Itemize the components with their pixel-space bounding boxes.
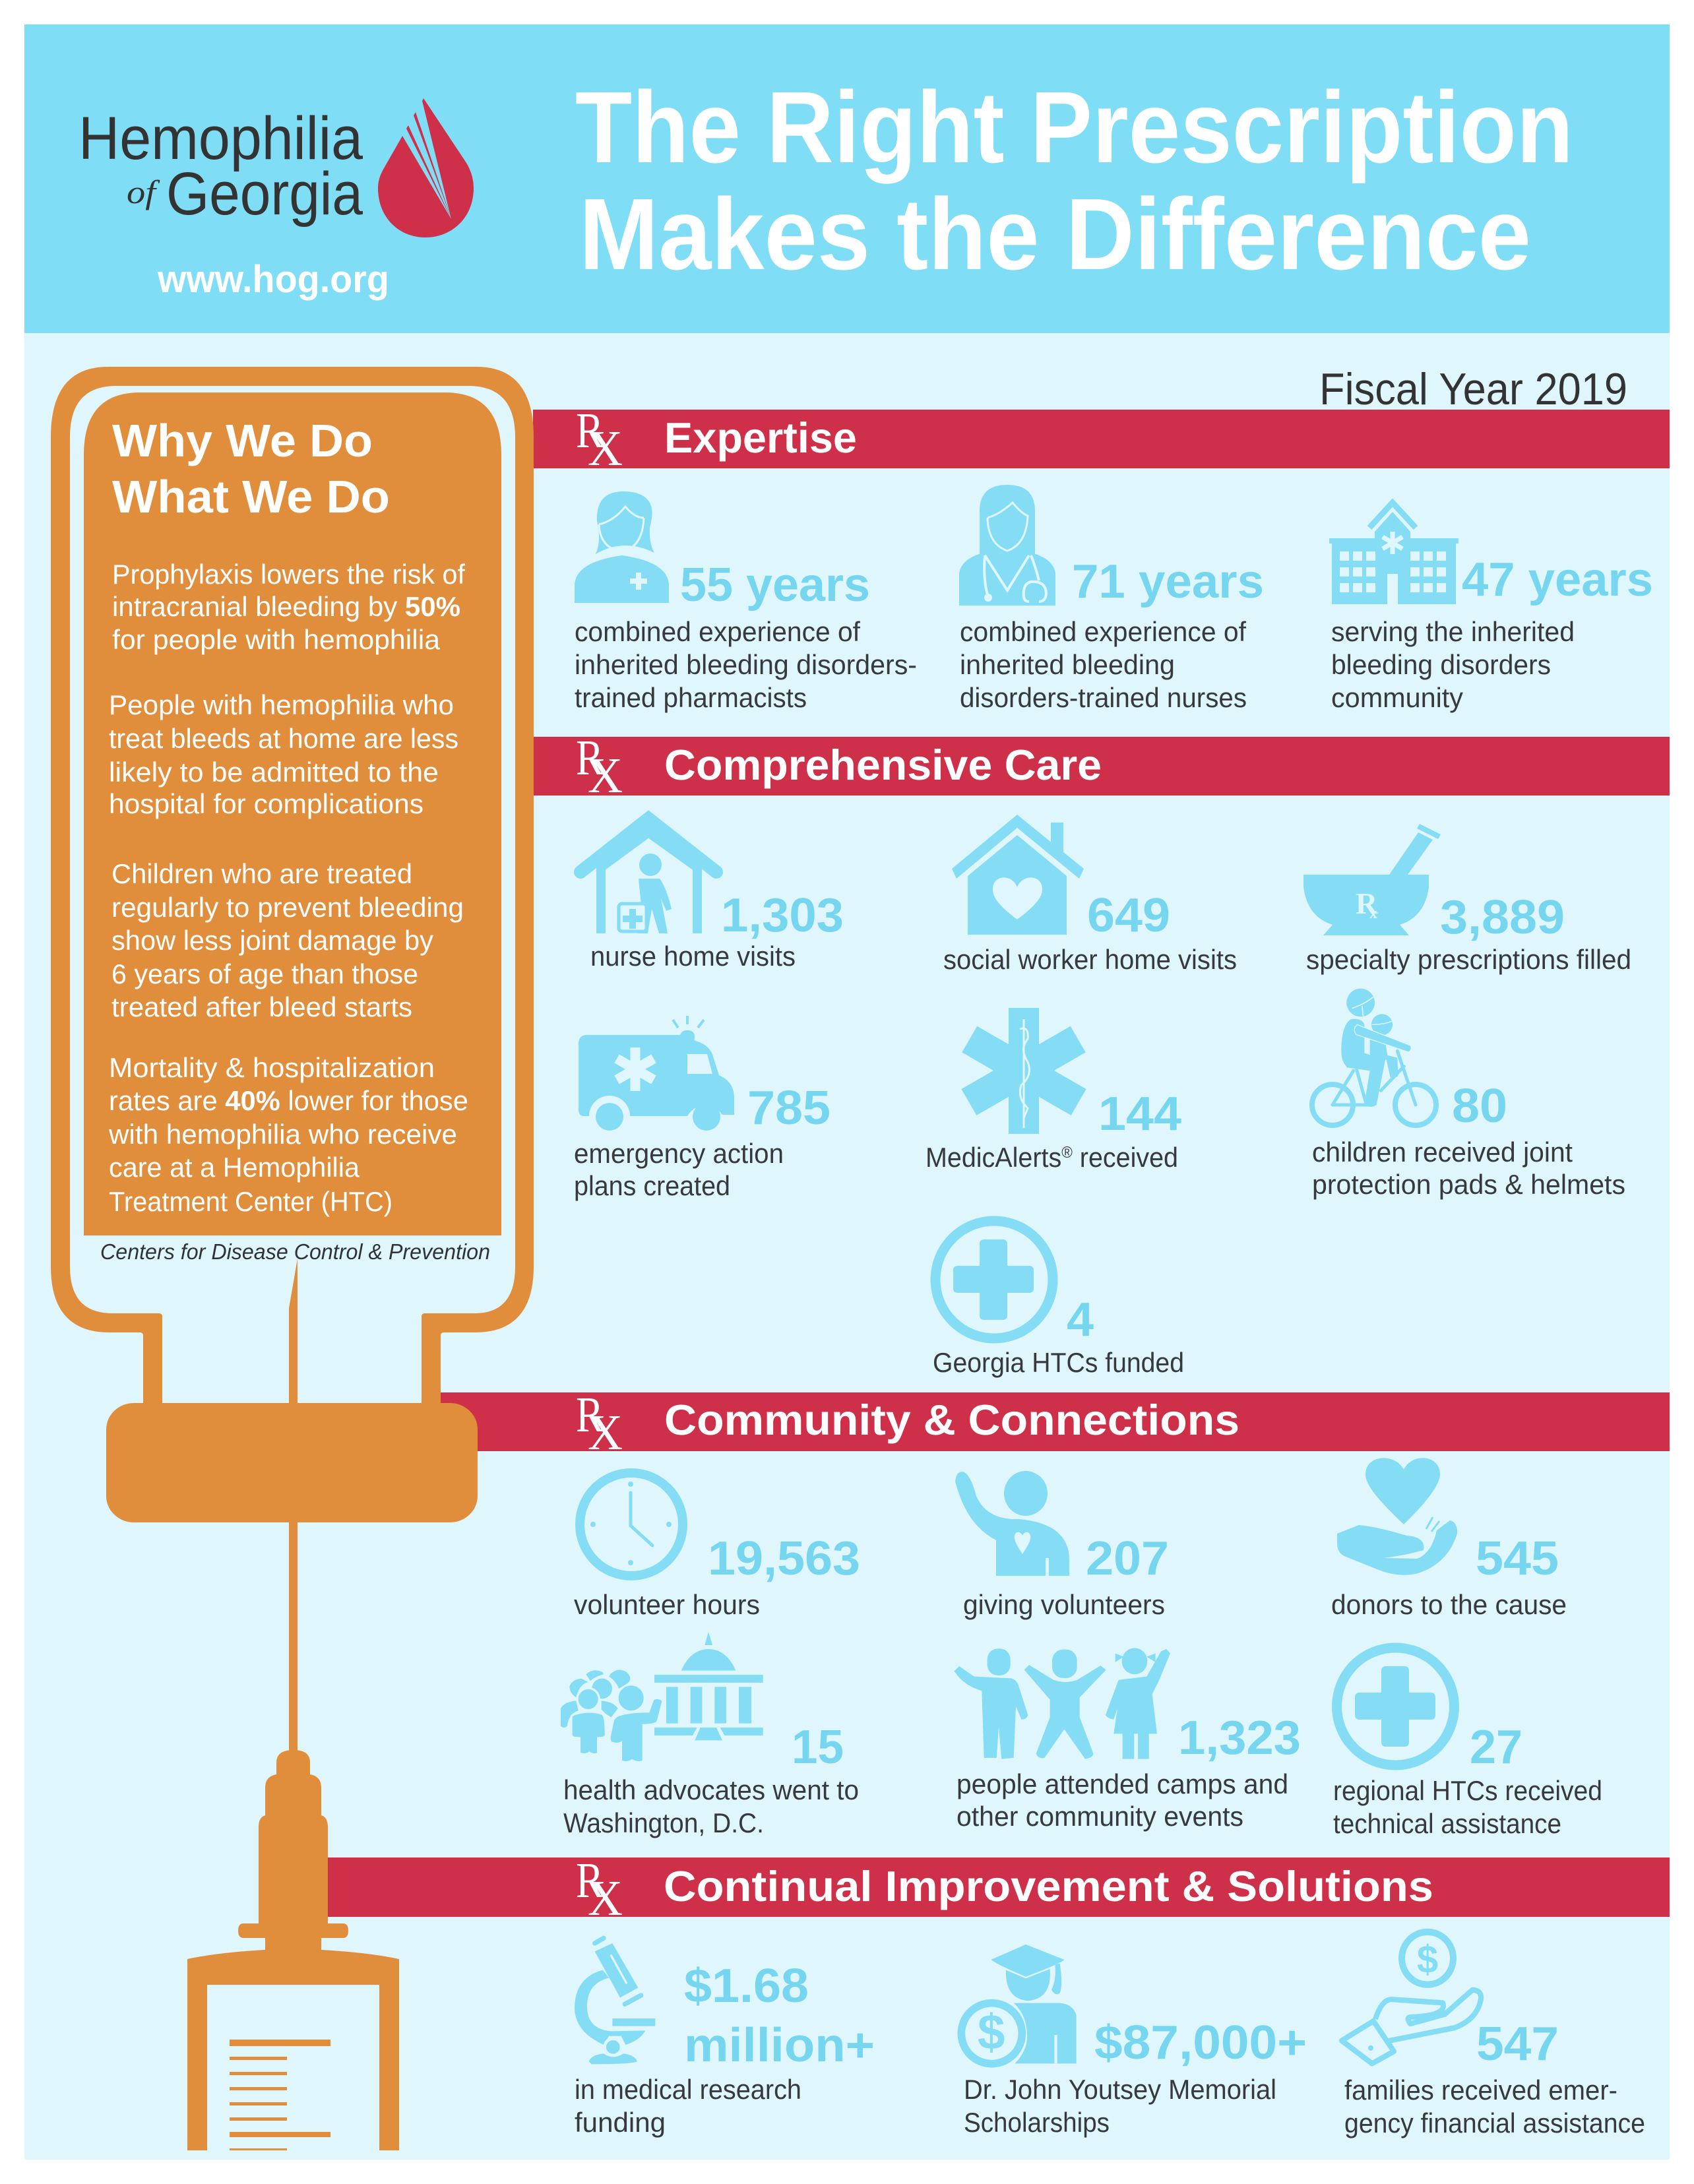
stat: Georgia HTCs funded: 4 [1067,1294,1094,1346]
stat: social worker home visits [943,815,1237,975]
section bar: Comprehensive Care: X [588,748,623,803]
text: children fact: show less joint damage by [111,925,433,956]
panel: continual improvement and solutions [328,1853,1670,2138]
section bar: Community & Connections: X [588,1405,623,1460]
text: children fact: treated after bleed starts [111,991,412,1022]
stat: MedicAlerts: received [1073,1142,1178,1173]
stat: medical research funding [575,1938,875,2138]
text: home treatment fact: hospital for complications [109,788,424,819]
text: mortality fact: with hemophilia who receive [108,1119,457,1150]
stat: MedicAlerts: MedicAlerts [925,1142,1070,1173]
stat: pharmacists [575,491,917,713]
stat: specialty prescriptions: x [1369,905,1377,922]
section bar: Comprehensive Care [533,730,1670,803]
section bar: Comprehensive Care: Comprehensive Care [664,741,1102,789]
section bar: Expertise: R [576,403,604,458]
stat: Georgia HTCs funded [933,1221,1184,1378]
stat: medical research funding: funding [575,2107,666,2138]
website url: www.hog.org [157,258,389,301]
stat: medical research funding: million+ [684,2019,875,2072]
stat: scholarships: Scholarships [964,2107,1110,2138]
text: mortality fact: rates are 40% lower for those [109,1085,468,1116]
panel: comprehensive care [533,730,1670,1378]
stat: MedicAlerts [925,1008,1181,1173]
title [575,71,1573,291]
text: mortality fact: Treatment Center (HTC) [109,1186,392,1217]
stat: MedicAlerts: ® [1061,1144,1073,1162]
text: prophylaxis fact: for people with hemophilia [112,624,441,655]
stat: emergency financial assistance: gency financial assistance [1344,2107,1645,2138]
IV bag, drip line and syringe illustration [51,367,534,2150]
stat: scholarships: Dr. John Youtsey Memorial [964,2074,1276,2105]
stat: scholarships [961,1944,1307,2138]
text: prophylaxis fact: intracranial bleeding by 50% [112,591,460,622]
section bar: Continual Improvement & Solutions: X [588,1871,623,1926]
stat: nurses [959,485,1264,713]
text: children fact: 6 years of age than those [111,958,418,989]
text: mortality fact: Mortality & hospitalization [109,1052,435,1083]
stat: health advocates [561,1632,859,1838]
stat: specialty prescriptions [1303,824,1631,975]
text: prophylaxis fact [112,559,465,655]
section bar: Expertise: X [588,421,623,476]
section bar: Community & Connections: Community & Connections [664,1396,1239,1444]
stat: emergency financial assistance [1342,1932,1645,2138]
stat: scholarships: $87,000+ [1094,2016,1307,2069]
stat: emergency financial assistance: 547 [1476,2018,1559,2071]
syringe [187,1750,399,2150]
stat: pharmacists: 55 years [680,559,870,611]
section bar: Continual Improvement & Solutions [328,1853,1670,1926]
text: home treatment fact: People with hemophilia who [109,689,454,720]
syringe measurement ticks [230,2040,330,2150]
stat: emergency action plans: emergency action [574,1138,784,1169]
stat: donors: 545 [1476,1532,1559,1585]
stat: nurses: disorders-trained nurses [960,682,1247,713]
stat: volunteer hours: volunteer hours [574,1589,760,1620]
text: prophylaxis fact: Prophylaxis lowers the risk of [112,559,465,590]
text: children fact: Children who are treated [111,858,412,889]
section bar: Expertise [533,403,1670,476]
stat: regional HTCs: 27 [1470,1721,1522,1774]
logo: Hemophilia of Georgia [78,98,474,237]
stat: Georgia HTCs funded: Georgia HTCs funded [933,1347,1184,1378]
section bar: Comprehensive Care: R [576,730,604,786]
section bar: Community & Connections [441,1387,1670,1460]
stat: emergency financial assistance: families received emer- [1344,2075,1617,2106]
stat: scholarships: $ [978,2005,1005,2060]
stat: medical research funding: in medical research [575,2074,801,2105]
stat: donors [1331,1458,1567,1620]
stat: regional HTCs [1333,1648,1602,1839]
stat: community years [1329,503,1653,713]
stat: regional HTCs: technical assistance [1333,1808,1561,1839]
stat: nurses: inherited bleeding [960,649,1175,680]
stat: community years: serving the inherited [1331,616,1575,647]
stat: joint protection pads: protection pads & helmets [1312,1169,1625,1200]
text: home treatment fact [109,689,458,819]
fiscal year label: Fiscal Year 2019 [1319,364,1627,414]
logo: Hemophilia of Georgia: Hemophilia [78,105,363,172]
drip tube [289,1259,298,1755]
stat: community years: community [1331,682,1463,713]
section bar: Expertise: Expertise [664,414,857,462]
stat: giving volunteers: giving volunteers [963,1589,1165,1620]
stat: MedicAlerts: 144 [1098,1088,1181,1140]
heading: why we do what we do: Why We Do [112,415,373,466]
section bar: Continual Improvement & Solutions: Continual Improvement & Solutions [664,1862,1433,1910]
panel: community and connections [441,1387,1670,1839]
title: The Right Prescription [575,71,1573,184]
stat: emergency financial assistance: $ [1417,1938,1438,1981]
stat: social worker home visits: social worker home visits [943,944,1237,975]
stat: pharmacists: inherited bleeding disorders- [575,649,917,680]
stat: camps and community events: people attended camps and [957,1768,1288,1799]
stat: health advocates: health advocates went to [563,1774,859,1805]
text: children fact [111,858,464,1022]
text: mortality fact [108,1052,468,1217]
stat: nurse home visits: nurse home visits [590,941,796,972]
stat: nurses: 71 years [1072,555,1264,608]
stat: emergency action plans: 785 [747,1082,831,1135]
section bar: Continual Improvement & Solutions: R [576,1853,604,1908]
IV bag outline [51,367,534,1403]
stat: pharmacists: combined experience of [575,616,860,647]
text: home treatment fact: treat bleeds at home are less [109,723,458,754]
stat: nurse home visits: 1,303 [721,889,844,942]
drip chamber [106,1403,478,1522]
heading: why we do what we do [112,415,390,522]
stat: regional HTCs: regional HTCs received [1333,1775,1602,1806]
stat: nurse home visits [580,819,844,972]
stat: giving volunteers: 207 [1086,1532,1169,1585]
stat: medical research funding: $1.68 [684,1960,809,2012]
stat: donors: donors to the cause [1331,1589,1567,1620]
source caption: Centers for Disease Control & Prevention [100,1239,490,1264]
text: home treatment fact: likely to be admitted to the [109,757,439,788]
text: mortality fact: care at a Hemophilia [109,1152,360,1183]
stat: community years: bleeding disorders [1331,649,1551,680]
stat: joint protection pads: children received joint [1312,1137,1573,1168]
stat: joint protection pads: 80 [1452,1080,1507,1133]
stat: emergency action plans: plans created [574,1170,730,1201]
panel: why we do what we do [84,392,501,1235]
text: children fact: regularly to prevent bleeding [111,892,464,923]
stat: camps and community events [955,1648,1301,1832]
stat: pharmacists: trained pharmacists [575,682,807,713]
stat: volunteer hours [574,1473,860,1620]
stat: volunteer hours: 19,563 [708,1532,860,1585]
stat: camps and community events: 1,323 [1178,1712,1301,1764]
logo: Hemophilia of Georgia: Georgia [166,160,363,228]
stat: social worker home visits: 649 [1087,889,1170,942]
panel: expertise [533,403,1670,713]
stat: health advocates: Washington, D.C. [563,1807,764,1838]
stat: specialty prescriptions: R [1356,887,1378,920]
stat: joint protection pads [1312,989,1625,1200]
logo: Hemophilia of Georgia: of [127,173,160,210]
stat: specialty prescriptions: 3,889 [1440,891,1565,944]
section bar: Community & Connections: R [576,1387,604,1443]
stat: health advocates: 15 [792,1721,844,1774]
stat: giving volunteers [955,1471,1169,1620]
header banner [24,24,1670,333]
heading: why we do what we do: What We Do [112,471,390,522]
stat: emergency action plans [574,1016,831,1201]
stat: community years: 47 years [1462,553,1653,606]
stat: specialty prescriptions: specialty prescriptions filled [1306,944,1631,975]
stat: nurses: combined experience of [960,616,1246,647]
title: Makes the Difference [579,177,1531,291]
stat: camps and community events: other community events [957,1801,1243,1832]
